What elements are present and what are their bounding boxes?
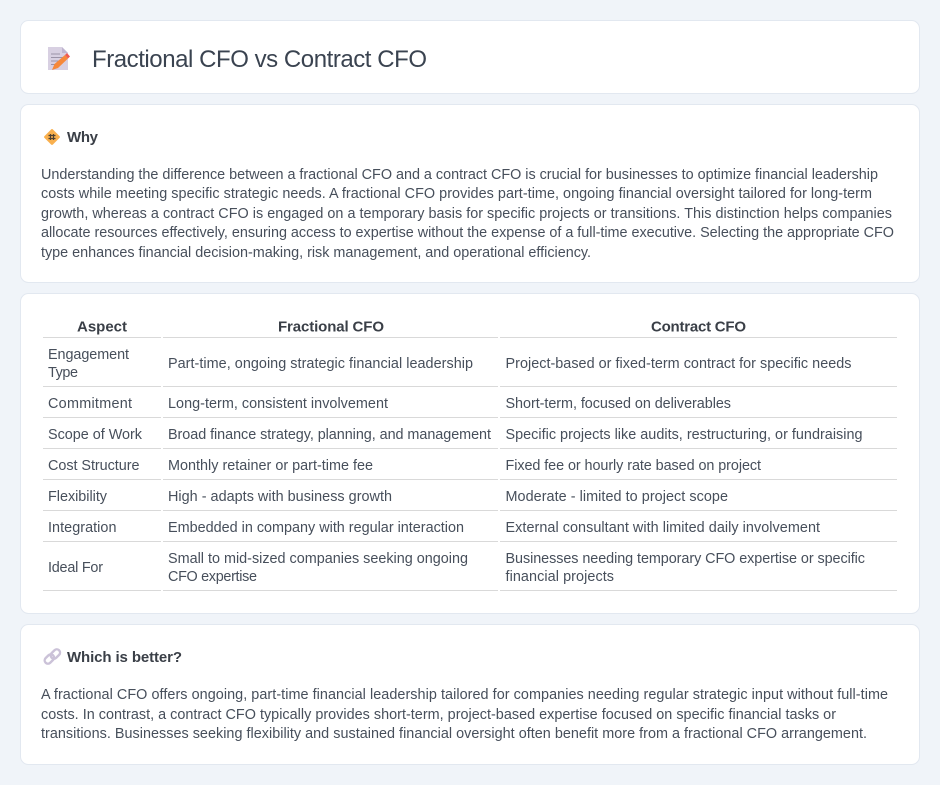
row: flexibility: Moderate - limited to project scope <box>506 489 728 505</box>
row: commitment: Long-term, consistent involvement <box>168 396 388 412</box>
row: scope of work: Broad finance strategy, planning, and management <box>168 427 491 443</box>
table header row <box>77 318 746 336</box>
row: cost structure: Monthly retainer or part-time fee <box>168 458 373 474</box>
icon: warning diamond <box>44 129 60 145</box>
row: cost structure: Cost Structure <box>48 458 140 474</box>
row: scope of work <box>48 427 862 443</box>
row: flexibility: Flexibility <box>48 489 108 505</box>
panel: which is better <box>20 624 920 764</box>
text block: which is better: costs. In contrast, a contract CFO typically provides short-term, project-based expertise focused on specific financial tasks or <box>41 707 836 723</box>
row: cost structure: Fixed fee or hourly rate based on project <box>506 458 761 474</box>
row: engagement type: Engagement <box>48 347 129 363</box>
row: ideal for <box>48 551 865 585</box>
text block: why: type enhances financial decision-making, risk management, and operational efficiency. <box>41 245 591 261</box>
panel: comparison table <box>20 294 920 614</box>
row: ideal for: Small to mid-sized companies seeking ongoing <box>168 551 468 567</box>
row: scope of work: Specific projects like audits, restructuring, or fundraising <box>506 427 862 443</box>
row: integration: Integration <box>48 520 116 536</box>
table header row: Contract CFO <box>651 318 746 336</box>
row: integration: External consultant with limited daily involvement <box>506 520 820 536</box>
row: flexibility <box>48 489 728 505</box>
row: flexibility: High - adapts with business growth <box>168 489 392 505</box>
row: cost structure <box>48 458 761 474</box>
header panel <box>20 20 920 94</box>
row: ideal for: financial projects <box>506 569 614 585</box>
row: engagement type: Part-time, ongoing strategic financial leadership <box>168 356 473 372</box>
row: engagement type: Type <box>48 365 78 381</box>
text block: which is better: transitions. Businesses seeking flexibility and sustained financial oversight often benefit more from a fractional CFO arrangement. <box>41 726 867 742</box>
row: ideal for: Ideal For <box>48 560 103 576</box>
row: commitment: Short-term, focused on deliverables <box>506 396 731 412</box>
icon: link <box>43 648 61 665</box>
row: integration: Embedded in company with regular interaction <box>168 520 464 536</box>
text block: why: costs while meeting specific strategic needs. A fractional CFO provides part-time, ongoing financial oversight tailored for long-term <box>41 186 872 202</box>
row: ideal for: CFO expertise <box>168 569 257 585</box>
heading: why: Why <box>67 129 99 146</box>
text block: why: allocate resources effectively, ensuring access to expertise without the expense of a full-time executive. Selecting the appropriate CFO <box>41 225 894 241</box>
row: ideal for: Businesses needing temporary CFO expertise or specific <box>506 551 865 567</box>
row: engagement type: Project-based or fixed-term contract for specific needs <box>506 356 852 372</box>
text block: which is better: A fractional CFO offers ongoing, part-time financial leadership tailored for companies needing regular strategic input without full-time <box>41 687 888 703</box>
icon: document with pencil <box>48 47 70 70</box>
text block: which is better <box>41 687 888 742</box>
title: Fractional CFO vs Contract CFO <box>92 46 427 73</box>
row: commitment <box>48 396 731 412</box>
table header row: Fractional CFO <box>278 318 384 336</box>
row: scope of work: Scope of Work <box>48 427 143 443</box>
row: integration <box>48 520 820 536</box>
text block: why: Understanding the difference between a fractional CFO and a contract CFO is crucial for businesses to optimize financial leadership <box>41 167 878 183</box>
heading: which is better: Which is better? <box>67 649 182 666</box>
table header row: Aspect <box>77 318 127 336</box>
row: commitment: Commitment <box>48 396 132 412</box>
text block: why: growth, whereas a contract CFO is engaged on a temporary basis for specific projects or transitions. This distinction helps companies <box>41 206 892 222</box>
panel: why <box>20 104 920 282</box>
row: engagement type <box>48 347 852 381</box>
text block: why <box>41 167 894 261</box>
